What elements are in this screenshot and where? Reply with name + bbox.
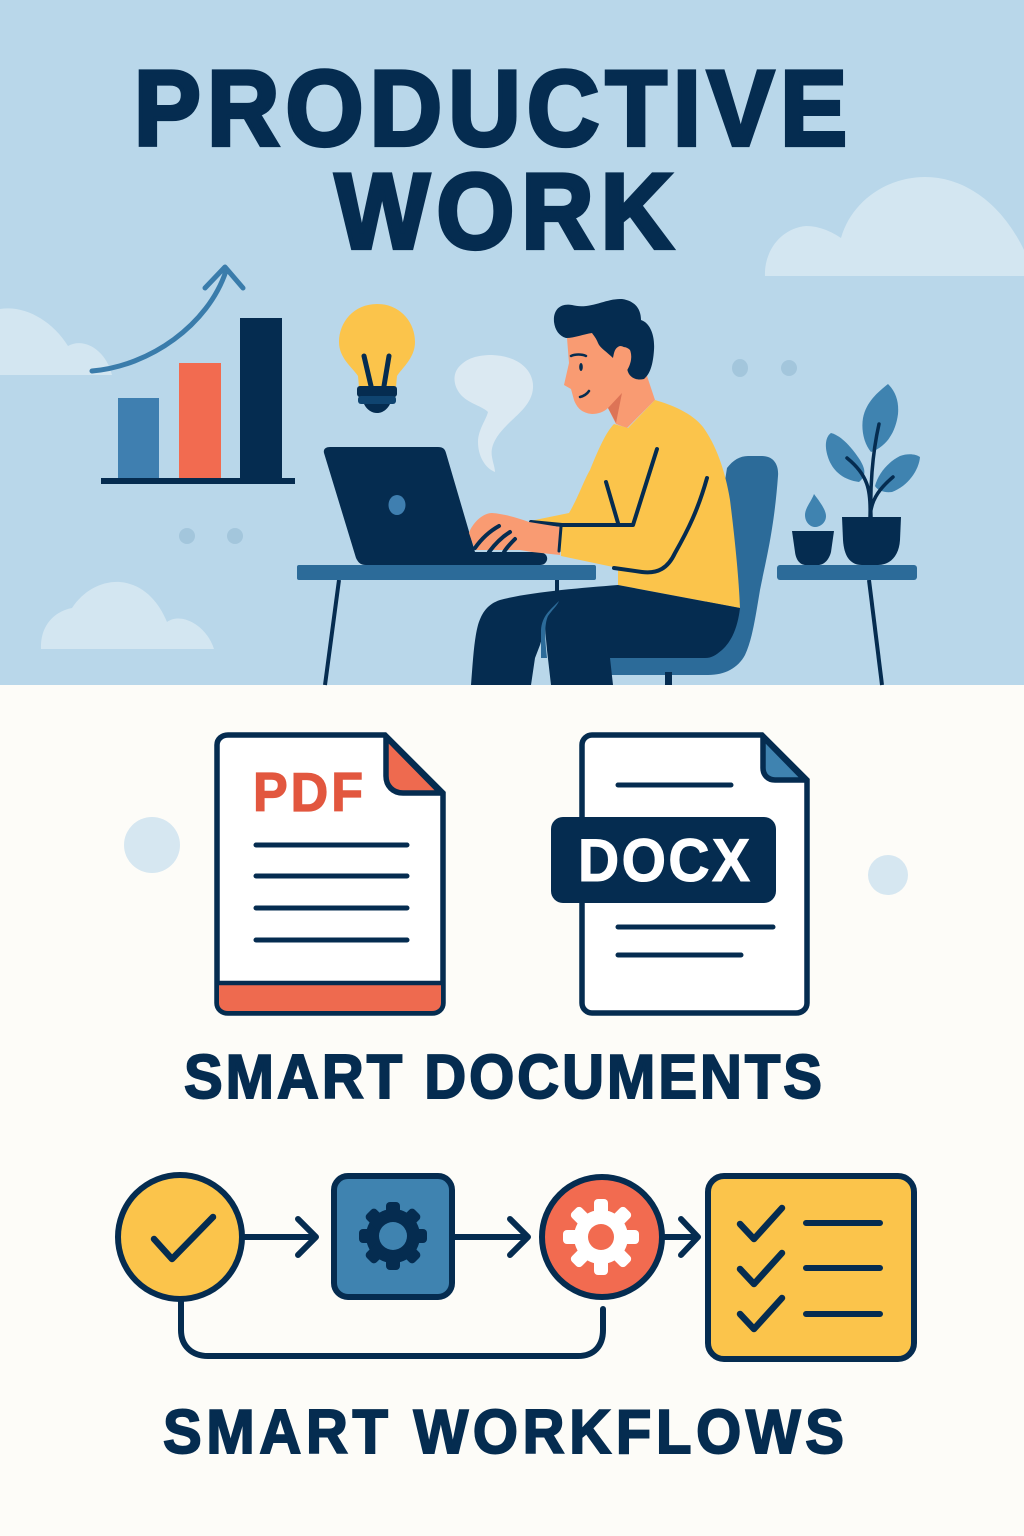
step 4: checklist: [708, 1176, 914, 1359]
hand with fingers: [469, 513, 561, 555]
neck shadow: [608, 393, 622, 423]
DOCX page fold: [763, 737, 805, 780]
DOCX label: DOCX: [578, 828, 750, 894]
step 2: gear box: [334, 1176, 452, 1297]
small potted plant: [792, 494, 834, 565]
pants fold: [541, 601, 559, 658]
laptop: [324, 447, 547, 565]
PDF page fold: [386, 737, 441, 793]
icon: light bulb: [339, 304, 415, 413]
arrow 3: [663, 1219, 698, 1255]
PDF text lines: [256, 845, 407, 940]
person: [471, 299, 740, 685]
icon: DOCX document: [551, 735, 807, 1013]
page lower background: [0, 685, 1024, 1536]
step 3: coral gear circle: [542, 1177, 662, 1297]
decorative dots left: [179, 528, 243, 544]
cloud: top right: [765, 177, 1024, 276]
bar chart with growth arrow: [92, 267, 295, 484]
growth arrow: [92, 267, 243, 371]
decorative dots right: [732, 359, 797, 377]
ear: [614, 347, 631, 372]
loop connector: [181, 1298, 603, 1356]
sweater: [530, 400, 740, 608]
cloud: bottom left: [41, 582, 214, 649]
desk: [297, 565, 596, 685]
sweater lines: [531, 449, 707, 572]
decorative circle right: [868, 855, 908, 895]
heading: smart documents: SMART DOCUMENTS: [184, 1042, 822, 1111]
DOCX label bar: [551, 817, 776, 903]
side table: [777, 565, 917, 685]
hair: [554, 299, 654, 379]
DOCX text lines: [618, 785, 773, 955]
arrow 1: [244, 1219, 316, 1255]
bar: coral: [179, 363, 221, 479]
step 1: check circle: [118, 1175, 242, 1299]
mouth: [580, 391, 589, 397]
chart axis: [101, 478, 295, 484]
title: [134, 48, 847, 271]
hero background: [0, 0, 1024, 685]
bar: blue: [118, 398, 159, 479]
cloud: left: [0, 308, 112, 375]
decorative circle left: [124, 817, 180, 873]
speech blob: [455, 355, 533, 472]
pants: [471, 585, 740, 685]
eye and brow: [571, 354, 586, 356]
icon: PDF document: [217, 735, 443, 1013]
neck and face: [564, 330, 655, 428]
title: WORK: [335, 151, 673, 271]
large potted plant: [826, 384, 920, 565]
heading: smart workflows: SMART WORKFLOWS: [163, 1397, 844, 1466]
title: PRODUCTIVE: [134, 48, 847, 168]
chair: [610, 456, 778, 685]
laptop logo: [388, 495, 406, 515]
PDF bottom band: [219, 984, 441, 1011]
bar: navy: [240, 318, 282, 479]
workflow diagram: [118, 1175, 914, 1359]
PDF label: PDF: [253, 762, 363, 823]
arrow 2: [453, 1219, 528, 1255]
